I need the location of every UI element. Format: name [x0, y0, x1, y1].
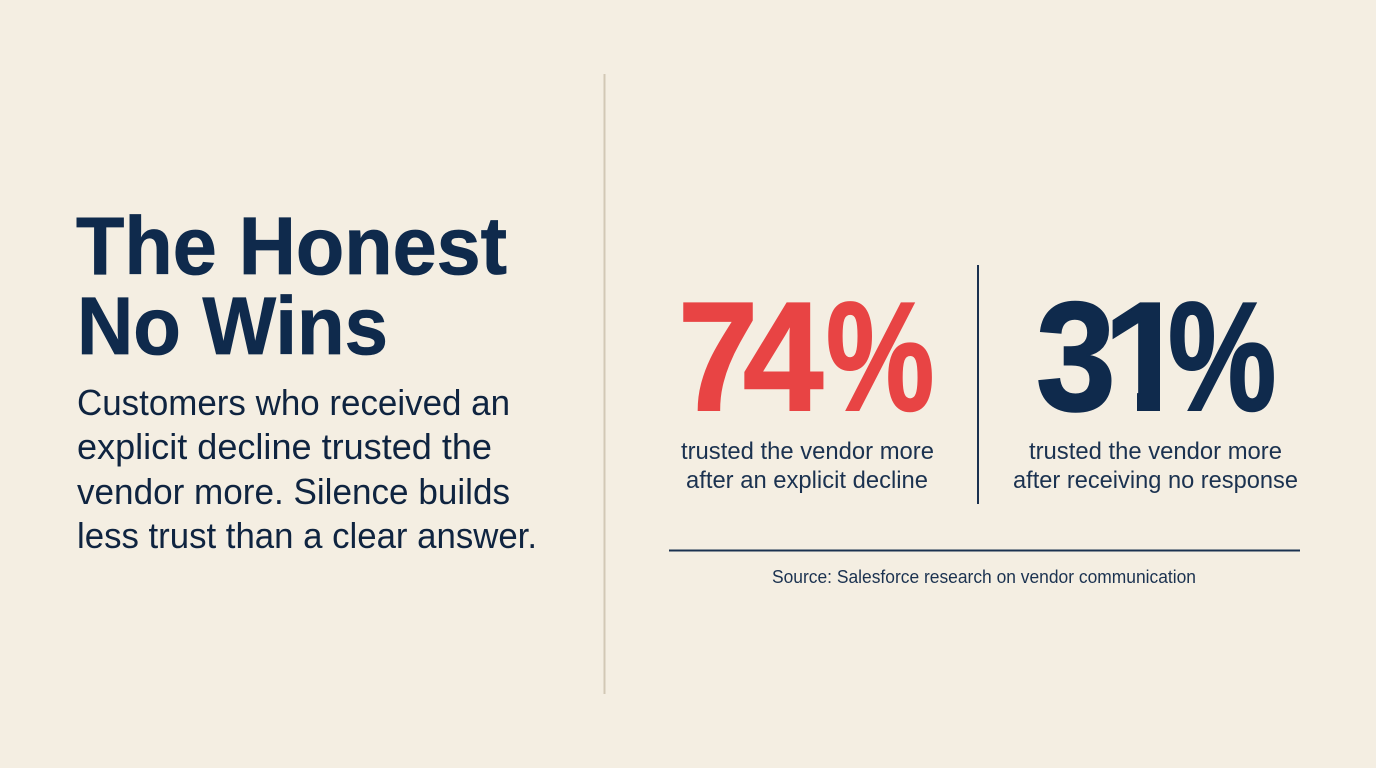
description text: Customers who received an [77, 382, 510, 423]
stat: 31 percent: 1 [1103, 270, 1189, 443]
title: The Honest [76, 201, 507, 292]
description text: explicit decline trusted the [77, 426, 492, 467]
stat: 31 percent: 3 [1036, 270, 1116, 443]
stat label: no response [1013, 438, 1298, 494]
stat label: no response: trusted the vendor more [1029, 438, 1282, 465]
stat label: no response: after receiving no response [1013, 467, 1298, 494]
stat: 74 percent [678, 270, 934, 494]
stat label: explicit decline [681, 438, 934, 494]
title: No Wins [77, 281, 388, 372]
description text: vendor more. Silence builds [77, 471, 510, 512]
description text [77, 382, 537, 556]
description text: less trust than a clear answer. [77, 515, 537, 556]
source note: Source: Salesforce research on vendor communication [772, 567, 1196, 587]
stat: 31 percent: % [1168, 270, 1276, 443]
stat label: explicit decline: trusted the vendor more [681, 438, 934, 465]
stat: 74 percent: % [826, 270, 934, 443]
title [76, 201, 507, 372]
stat: 74 percent: 74 [678, 270, 823, 443]
stat: 31 percent [1014, 300, 1297, 493]
stat label: explicit decline: after an explicit decline [686, 467, 928, 494]
